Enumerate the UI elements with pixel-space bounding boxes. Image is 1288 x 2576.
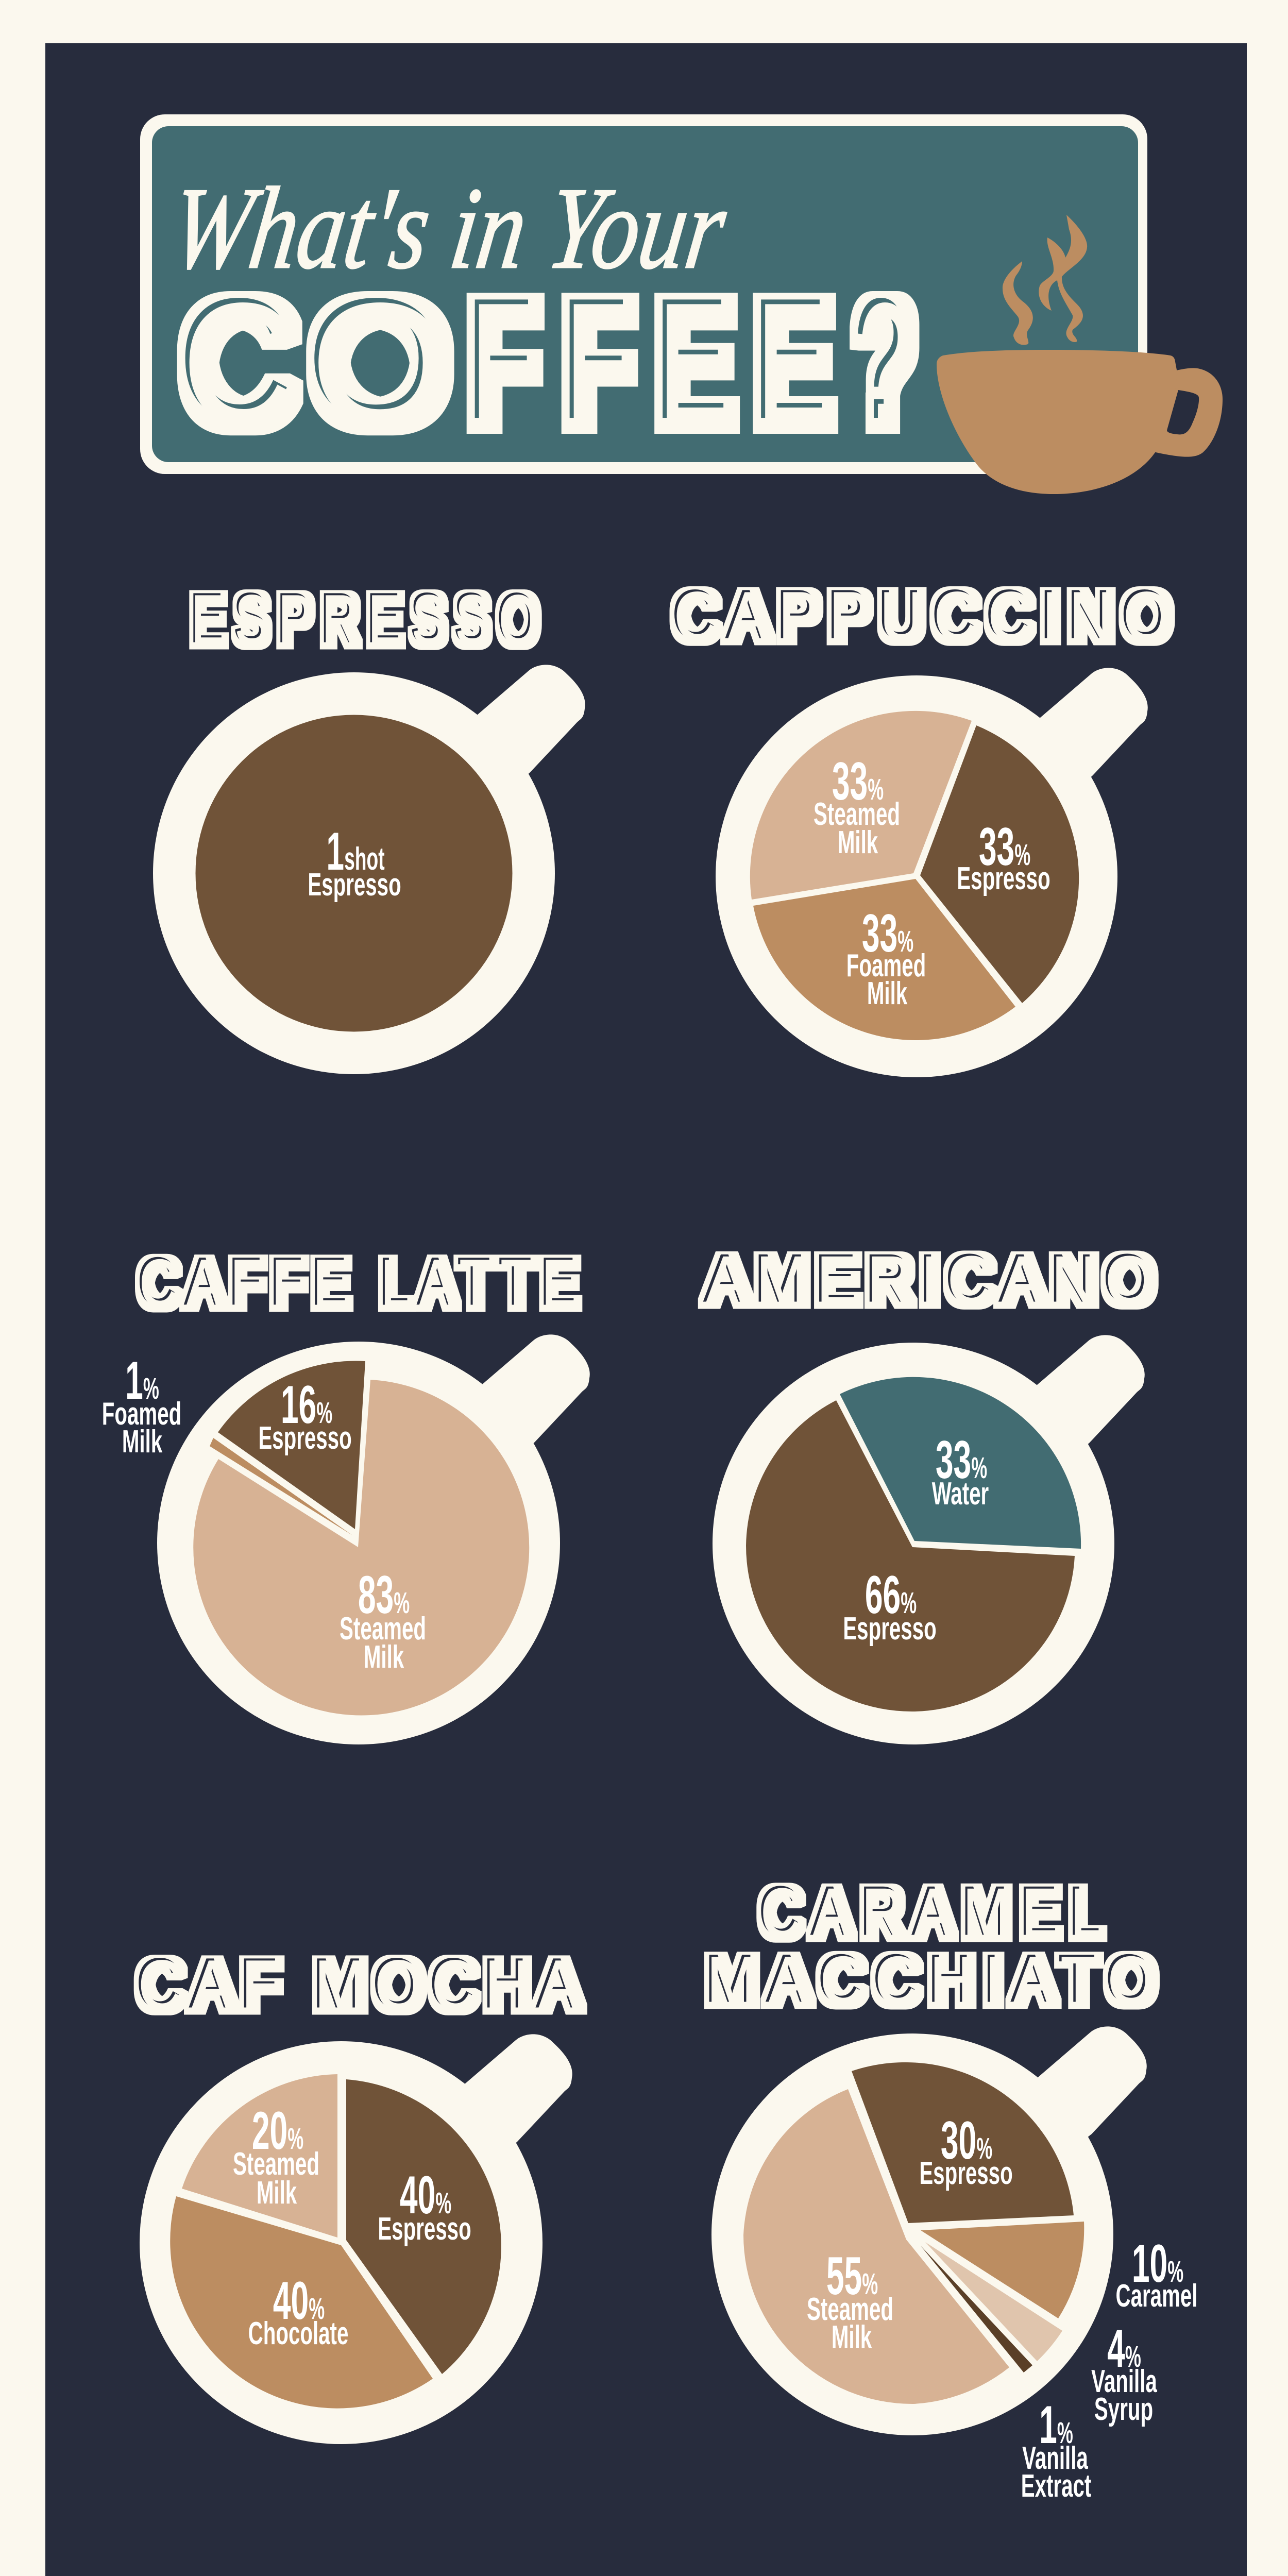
slice: espresso [746,1400,1075,1711]
label: 33% steamed milk: 33% [832,752,884,811]
slice: caramel [921,2222,1084,2318]
header banner [140,114,1147,474]
label: 33% steamed milk [814,752,900,860]
label: 33% water [932,1430,989,1512]
label: 66% espresso [843,1565,937,1647]
label: 16% espresso [258,1375,352,1456]
title line: COFFEE?: E [757,268,830,457]
title line: COFFEE?: F [471,268,536,457]
label: 33% water: 33% [936,1430,987,1490]
label: 1 shot espresso: 1shot [326,822,385,882]
panel: Caffe Latte cup [102,1334,590,1744]
label: 1% vanilla extract: 1% [1039,2395,1073,2455]
heading: Caf Mocha: CAF MOCHA [139,1946,579,2024]
slice: water [840,1377,1081,1549]
label: 83% steamed milk [340,1565,426,1675]
label: 33% foamed milk: 33% [862,904,913,963]
label: 40% chocolate: Chocolate [248,2316,348,2351]
slice: steamed milk [182,2074,337,2238]
panel: Espresso cup [153,665,585,1074]
title line: COFFEE?: E [658,268,732,457]
heading: Cappuccino: CAPPUCCINO [674,579,1170,654]
label: 66% espresso: Espresso [843,1611,937,1647]
slice: espresso [346,2079,501,2374]
label: 10% caramel: Caramel [1116,2278,1197,2314]
label: 40% espresso: Espresso [378,2211,471,2247]
label: 40% espresso: 40% [400,2165,451,2225]
label: 1% vanilla extract: Vanilla [1022,2441,1089,2476]
title line: COFFEE?: F [566,268,631,457]
label: 10% caramel [1116,2234,1197,2314]
slice: vanilla syrup [925,2242,1062,2361]
label: 30% espresso: 30% [941,2111,992,2171]
label: 1 shot espresso: Espresso [308,867,401,903]
label: 16% espresso: 16% [281,1375,332,1435]
label: 55% steamed milk: Milk [832,2319,872,2355]
panel: Americano cup [713,1335,1145,1744]
label: 20% steamed milk [233,2101,319,2211]
heading: Espresso: ESPRESSO [192,581,538,658]
slice: foamed milk [753,879,1015,1040]
label: 1% foamed milk: Foamed [102,1396,181,1432]
slice: chocolate [170,2196,433,2409]
label: 55% steamed milk: 55% [826,2246,878,2306]
label: 33% espresso [957,817,1050,896]
slice: espresso [852,2062,1074,2223]
panel: Caramel Macchiato cup [711,2026,1147,2435]
label: 33% espresso: 33% [979,817,1030,877]
label: 1 shot espresso [308,822,401,903]
label: 1% vanilla extract: Extract [1021,2468,1091,2504]
icon: steaming coffee cup [937,215,1223,494]
heading: Caramel Macchiato: CARAMEL [761,1875,1102,1951]
label: 4% vanilla syrup: 4% [1107,2319,1141,2379]
label: 1% vanilla extract [1021,2395,1091,2504]
slice: steamed milk [193,1380,529,1716]
label: 20% steamed milk: 20% [252,2101,303,2161]
label: 1% foamed milk: Milk [122,1424,163,1460]
label: 33% water: Water [932,1476,989,1512]
heading: Caffe Latte: CAFFE LATTE [140,1246,578,1320]
label: 33% foamed milk [846,904,926,1011]
label: 20% steamed milk: Steamed [233,2146,319,2182]
label: 33% espresso: Espresso [957,861,1050,896]
label: 55% steamed milk [807,2246,893,2355]
label: 1% foamed milk: 1% [125,1351,159,1411]
label: 10% caramel: 10% [1132,2234,1183,2294]
label: 33% steamed milk: Milk [838,825,878,860]
label: 20% steamed milk: Milk [257,2175,297,2211]
label: 83% steamed milk: Milk [364,1639,404,1675]
slice: espresso [218,1361,365,1529]
label: 30% espresso [919,2111,1013,2191]
label: 83% steamed milk: 83% [358,1565,410,1625]
label: 4% vanilla syrup: Vanilla [1091,2364,1158,2399]
heading: Caramel Macchiato: MACCHIATO [707,1943,1155,2017]
title line: COFFEE?: ? [859,268,910,457]
label: 40% chocolate: 40% [273,2271,325,2331]
label: 33% foamed milk: Milk [867,976,908,1011]
heading: Caramel Macchiato [707,1875,1155,2017]
label: 55% steamed milk: Steamed [807,2292,893,2327]
heading: Americano: AMERICANO [706,1243,1154,1317]
label: 83% steamed milk: Steamed [340,1611,426,1647]
slice: steamed milk [750,711,972,900]
label: 40% espresso [378,2165,471,2247]
title line: COFFEE?: O [311,268,449,457]
label: 30% espresso: Espresso [919,2156,1013,2191]
label: 66% espresso: 66% [865,1565,917,1625]
title line: What's in Your: What's in Your [164,164,734,293]
label: 4% vanilla syrup [1091,2319,1158,2427]
label: 33% foamed milk: Foamed [846,948,926,984]
title line: COFFEE?: C [182,268,296,457]
label: 40% chocolate [248,2271,348,2351]
label: 33% steamed milk: Steamed [814,796,900,832]
label: 4% vanilla syrup: Syrup [1094,2392,1153,2427]
label: 1% foamed milk [102,1351,181,1460]
slice: vanilla extract [921,2246,1032,2372]
slice: foamed milk [210,1438,352,1535]
slice: espresso [920,725,1079,1003]
label: 16% espresso: Espresso [258,1420,352,1456]
panel: Cappuccino cup [716,668,1148,1077]
panel: Caf Mocha cup [140,2034,572,2444]
slice: steamed milk [743,2089,1009,2404]
